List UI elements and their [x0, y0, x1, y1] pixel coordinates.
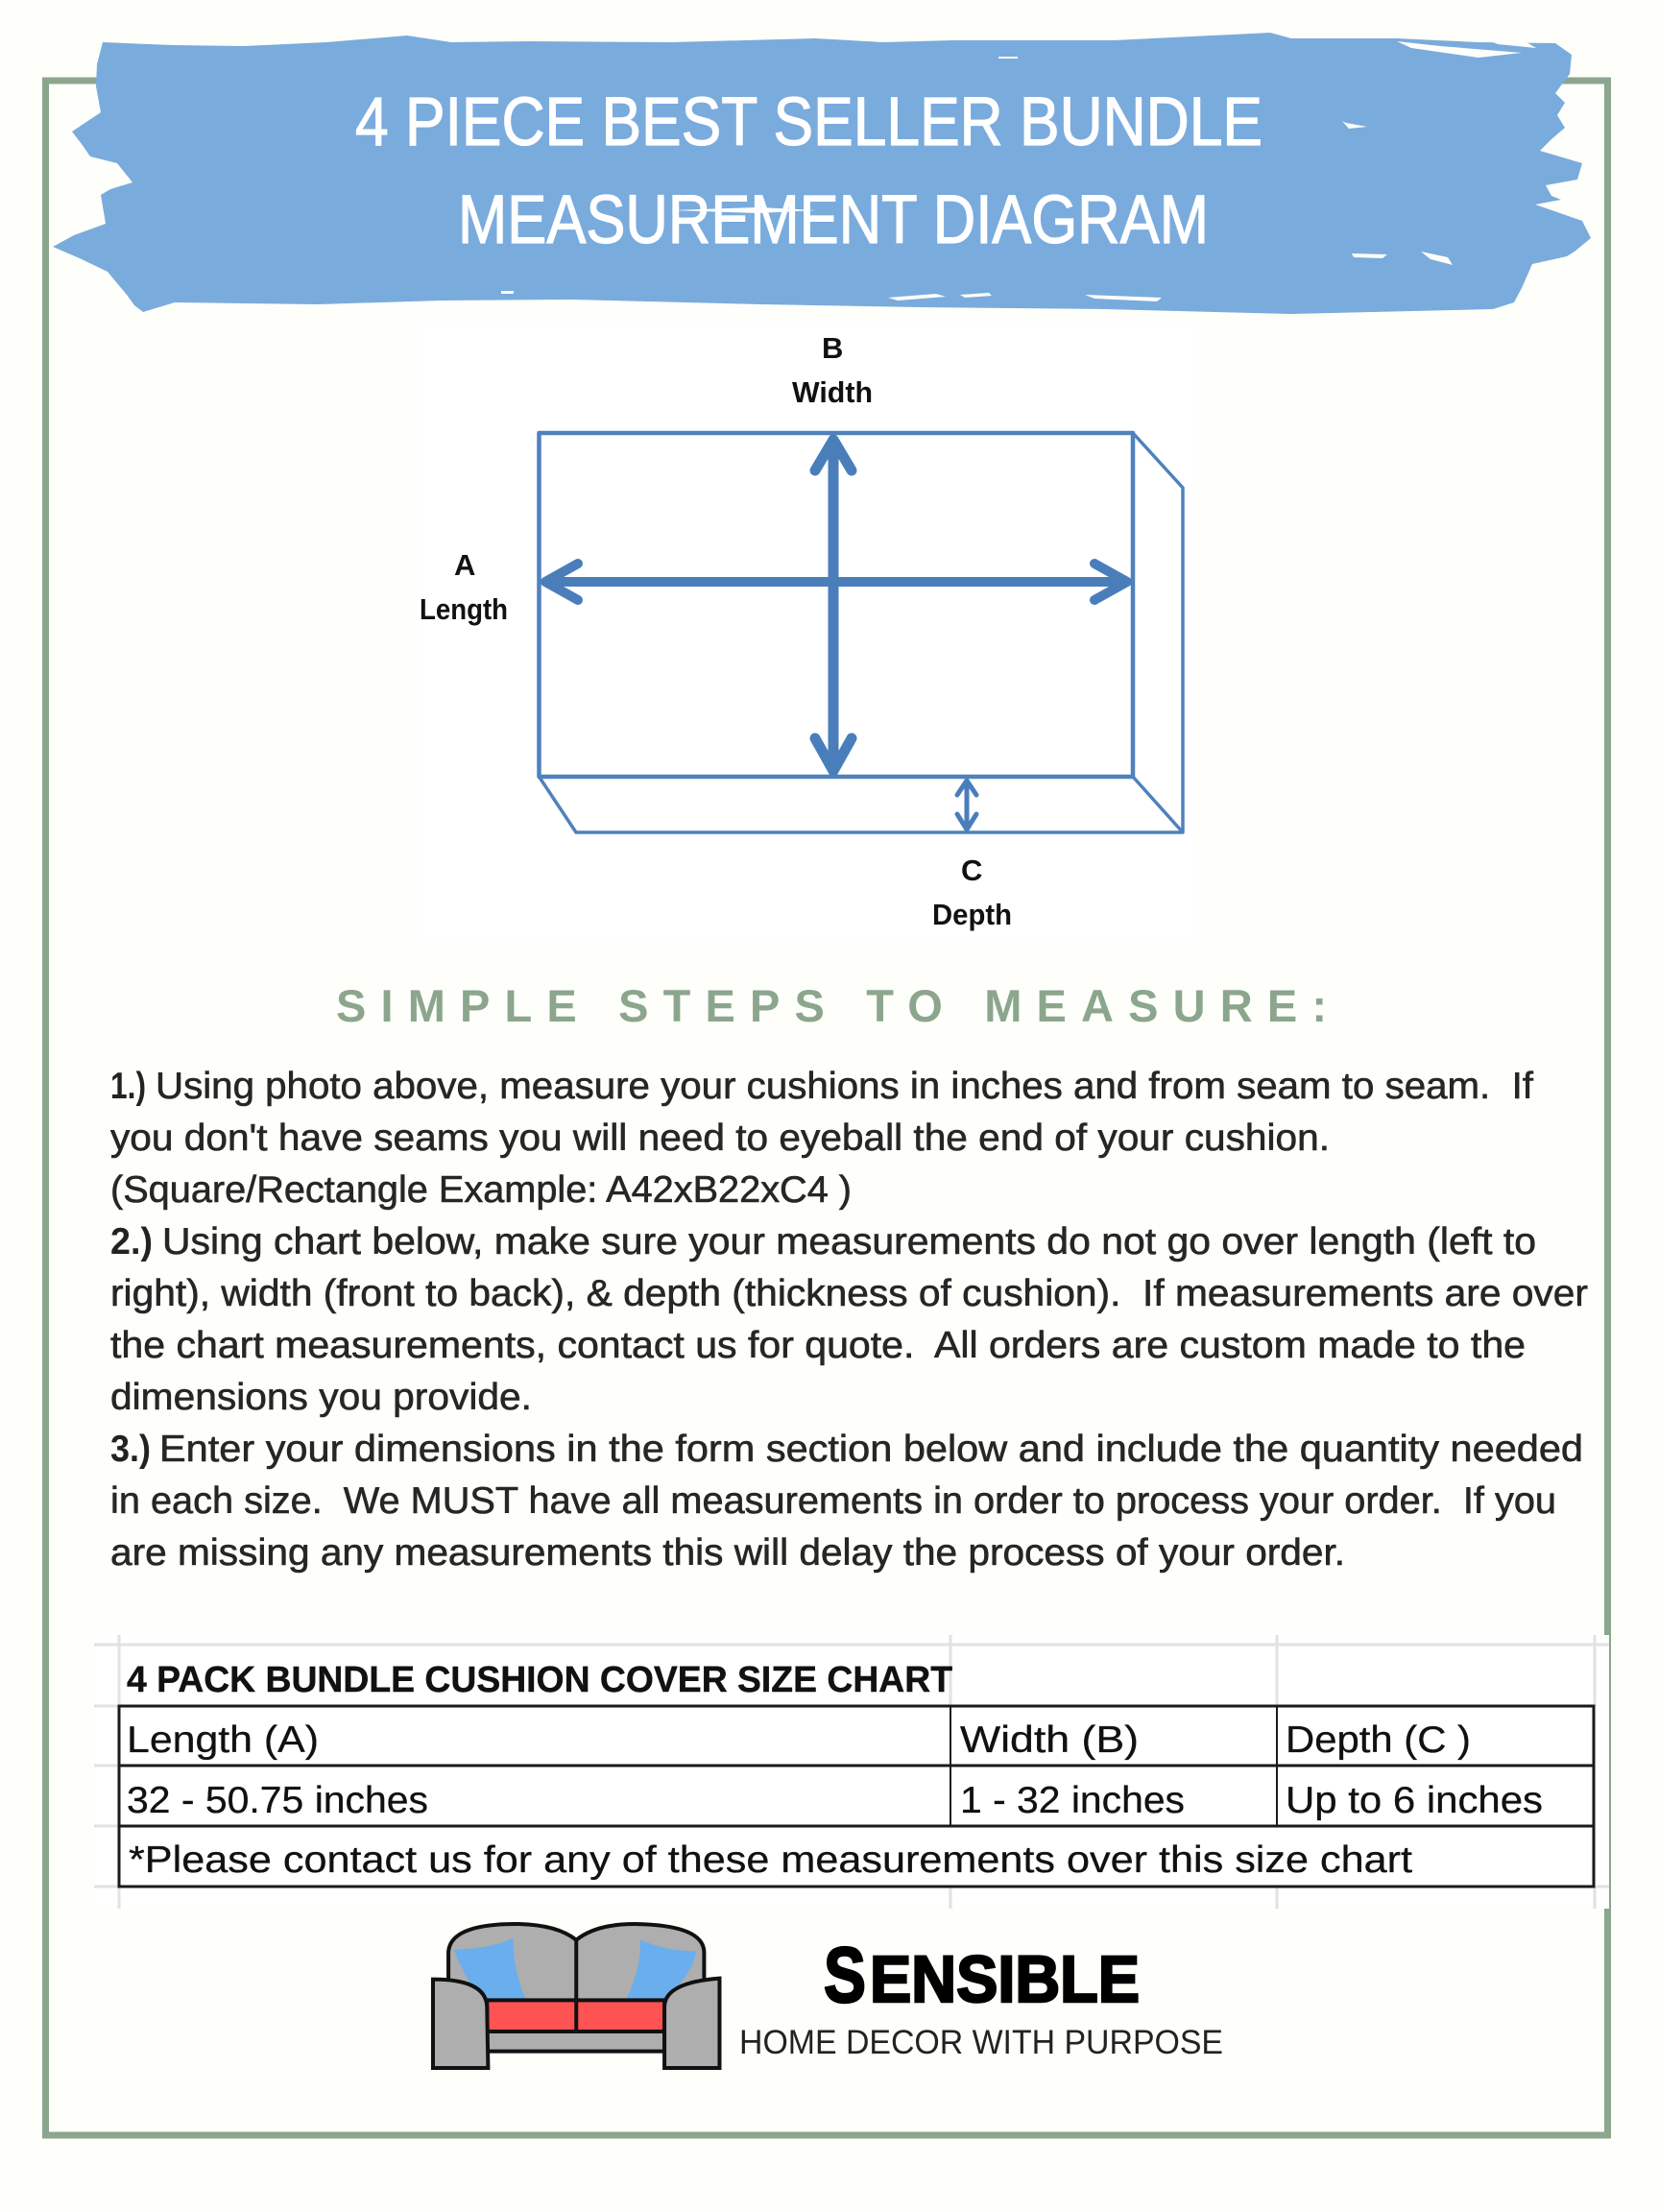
label: C Depth — [932, 854, 1012, 931]
step 1 — [110, 1066, 1533, 1211]
chart title: 4 PACK BUNDLE CUSHION COVER SIZE CHART — [127, 1660, 952, 1700]
step 1: 1.) — [110, 1066, 146, 1107]
step 1: Using photo above, measure your cushions in inches and from seam to seam. If — [156, 1066, 1533, 1107]
header row: Width (B) — [960, 1719, 1139, 1761]
title banner — [53, 33, 1591, 314]
spreadsheet grid — [94, 1635, 1609, 1909]
label: B Width — [792, 331, 873, 409]
arrow: depth — [957, 781, 976, 830]
label: B Width: Width — [792, 375, 873, 409]
label: B Width: B — [822, 331, 843, 365]
label: A Length — [420, 548, 508, 626]
logo — [433, 1924, 1223, 2068]
step 3: in each size. We MUST have all measurements in order to process your order. If you — [110, 1480, 1556, 1522]
title text: MEASUREMENT DIAGRAM — [458, 182, 1209, 258]
step 1: you don't have seams you will need to eyeball the end of your cushion. — [110, 1118, 1330, 1159]
step 2: the chart measurements, contact us for quote. All orders are custom made to the — [110, 1325, 1526, 1366]
title text — [355, 84, 1262, 258]
title text: 4 PIECE BEST SELLER BUNDLE — [355, 84, 1262, 160]
step 3: Enter your dimensions in the form section below and include the quantity needed — [159, 1429, 1583, 1470]
brand name: ENSIBLE — [870, 1942, 1140, 2016]
step 1: (Square/Rectangle Example: A42xB22xC4 ) — [110, 1169, 852, 1211]
instructions text — [110, 1066, 1588, 1574]
values row — [127, 1780, 1543, 1821]
contact note: *Please contact us for any of these measurements over this size chart — [129, 1839, 1412, 1881]
values row: 1 - 32 inches — [960, 1780, 1185, 1821]
values row: Up to 6 inches — [1286, 1780, 1543, 1821]
step 3 — [110, 1429, 1583, 1574]
arrow: width — [815, 440, 852, 771]
step 3: are missing any measurements this will delay the process of your order. — [110, 1532, 1345, 1574]
step 2: dimensions you provide. — [110, 1377, 532, 1418]
values row: 32 - 50.75 inches — [127, 1780, 428, 1821]
label: A Length: Length — [420, 592, 508, 626]
step 3: 3.) — [110, 1429, 151, 1470]
brush flecks — [501, 38, 1536, 301]
label: C Depth: Depth — [932, 898, 1012, 931]
step 2 — [110, 1221, 1588, 1418]
step 2: Using chart below, make sure your measurements do not go over length (left to — [162, 1221, 1536, 1262]
tagline: HOME DECOR WITH PURPOSE — [739, 2024, 1223, 2061]
header row: Length (A) — [127, 1719, 319, 1761]
arrow: length — [545, 564, 1127, 600]
table borders — [119, 1706, 1594, 1887]
brush stroke background — [53, 33, 1591, 314]
step 2: 2.) — [110, 1221, 153, 1262]
label: A Length: A — [454, 548, 475, 582]
measurement diagram — [418, 322, 1196, 942]
icon: sofa — [433, 1924, 719, 2068]
step 2: right), width (front to back), & depth (thickness of cushion). If measurements are over — [110, 1273, 1588, 1314]
heading: simple steps: SIMPLE STEPS TO MEASURE: — [336, 980, 1327, 1031]
brand name — [824, 1932, 1140, 2019]
brand name: S — [824, 1932, 866, 2019]
header row: Depth (C ) — [1286, 1719, 1471, 1761]
size chart table — [94, 1635, 1609, 1909]
label: C Depth: C — [961, 854, 982, 887]
header row — [127, 1719, 1471, 1761]
box outline — [540, 433, 1183, 832]
